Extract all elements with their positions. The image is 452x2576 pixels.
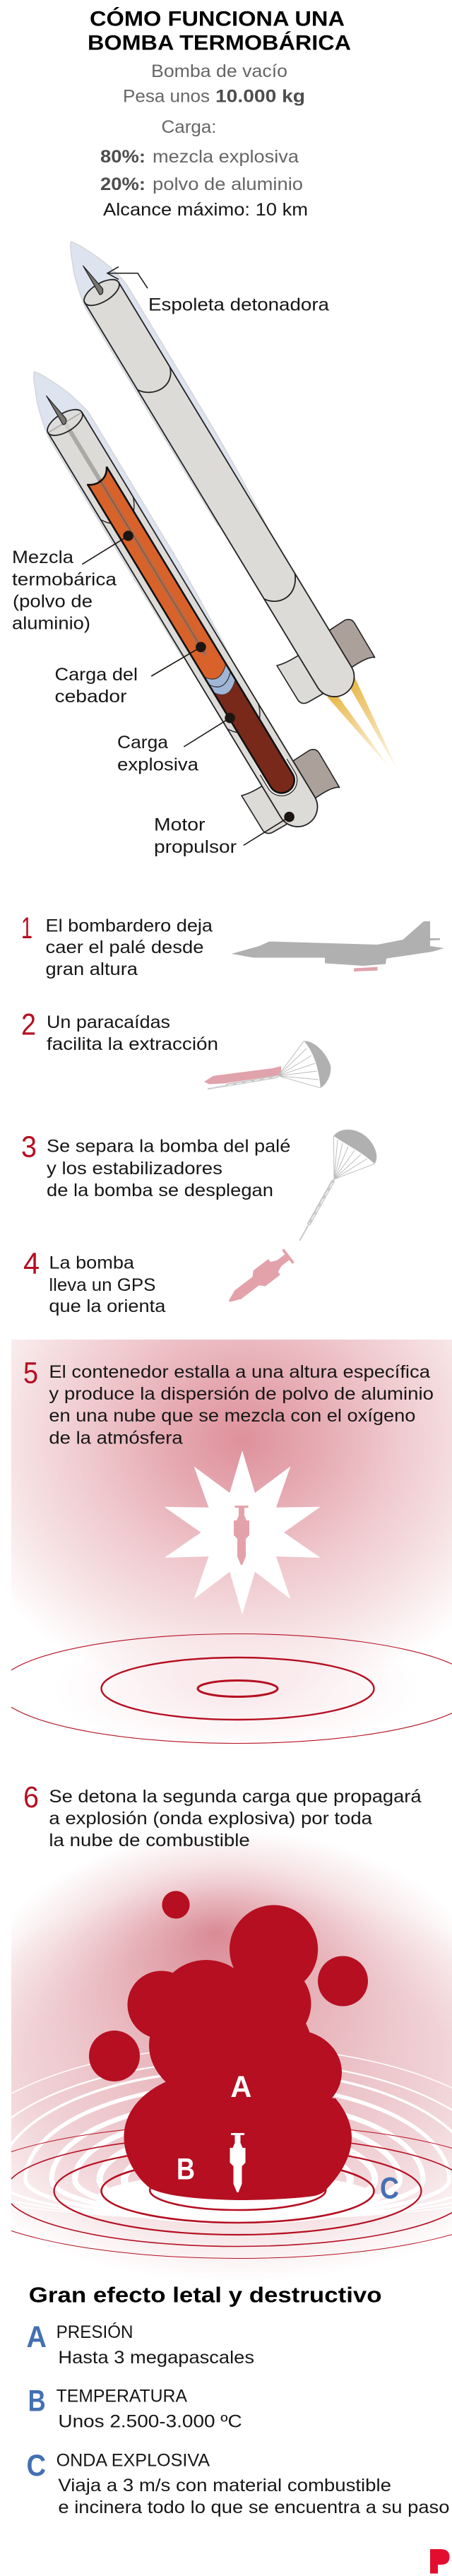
label: primer charge <box>55 665 138 707</box>
specs text block <box>100 61 308 220</box>
icon: guided bomb <box>223 1248 295 1309</box>
thermobaric mix <box>85 467 230 683</box>
item A: pressure: Hasta 3 megapascales <box>58 2348 254 2368</box>
step 1 <box>21 911 444 979</box>
label: thermobaric mix: aluminio) <box>12 613 90 633</box>
label: primer charge: cebador <box>55 687 127 707</box>
step 1 text: El bombardero deja <box>45 916 213 935</box>
step 6 text <box>49 1787 422 1850</box>
step 3 text: Se separa la bomba del palé <box>47 1137 290 1157</box>
icon: bomber aircraft <box>232 921 444 966</box>
glow background <box>11 1340 452 1763</box>
step 6 text: la nube de combustible <box>49 1831 250 1850</box>
bomb section view <box>16 359 330 835</box>
step 2 <box>21 1008 331 1089</box>
lower glow background <box>11 1830 452 2282</box>
upper glow background <box>11 1830 452 2282</box>
explosive charge <box>213 680 299 798</box>
icon: parachute with empty pallet <box>299 1130 376 1241</box>
number 5: 5 <box>23 1357 38 1390</box>
step 2 text: Un paracaídas <box>47 1012 170 1032</box>
item B: temperature <box>28 2385 242 2431</box>
label: fuze: Espoleta detonadora <box>148 295 329 315</box>
label: explosive charge <box>117 733 198 774</box>
panel: step 6, detonation <box>0 1780 452 2282</box>
step 4 text: que la orienta <box>49 1296 165 1316</box>
step 4 <box>23 1246 295 1316</box>
step 1 text <box>45 916 213 979</box>
label: thermobaric mix: termobárica <box>12 569 117 589</box>
fins <box>242 750 340 834</box>
shock wave bands <box>0 2047 452 2224</box>
icon: publisher logo <box>430 2549 449 2573</box>
item C: blast wave: e incinera todo lo que se encuentra a su paso <box>58 2498 449 2517</box>
specs text block: 10.000 kg <box>215 87 305 107</box>
ground rings <box>0 2124 452 2258</box>
step 3 text: de la bomba se desplegan <box>47 1181 273 1200</box>
label: rocket motor: propulsor <box>154 837 237 857</box>
label C: C <box>380 2172 399 2206</box>
step 4 text: lleva un GPS <box>49 1275 155 1295</box>
specs text block: Alcance máximo: 10 km <box>103 200 308 220</box>
step 6 text: a explosión (onda explosiva) por toda <box>49 1809 372 1828</box>
inner casing outline <box>85 467 299 798</box>
ground rings <box>0 1633 452 1744</box>
title: CÓMO FUNCIONA UNA <box>90 7 345 31</box>
bomb body with fairing <box>52 229 367 705</box>
label: rocket motor: Motor <box>154 815 205 835</box>
label: thermobaric mix: (polvo de <box>13 592 93 612</box>
step 5 text <box>49 1362 434 1448</box>
primer charge <box>204 663 239 699</box>
letter B: B <box>28 2385 46 2418</box>
exhaust flames <box>327 677 400 774</box>
label: explosive charge: explosiva <box>117 755 198 774</box>
exterior bomb <box>52 229 400 774</box>
specs text block: Carga: <box>161 117 216 137</box>
step 1 text: caer el palé desde <box>45 938 203 957</box>
leader lines and dots <box>82 531 295 845</box>
central rod in mix <box>101 482 205 654</box>
label B: B <box>177 2152 195 2186</box>
step 5 text: de la atmósfera <box>49 1429 183 1448</box>
step 3 text <box>47 1137 290 1200</box>
item B: temperature: Unos 2.500-3.000 ºC <box>58 2411 242 2431</box>
letter A: A <box>27 2320 47 2354</box>
number 3: 3 <box>21 1130 37 1164</box>
rim around explosive charge <box>234 716 303 802</box>
step 3 text: y los estabilizadores <box>47 1159 222 1178</box>
step 6 text: Se detona la segunda carga que propagará <box>49 1787 422 1807</box>
step 4 text: La bomba <box>49 1253 134 1273</box>
number 4: 4 <box>23 1246 40 1280</box>
central rod above cut <box>65 423 100 480</box>
icon: pallet under aircraft <box>354 967 377 971</box>
item C: blast wave: ONDA EXPLOSIVA <box>56 2451 210 2471</box>
label: primer charge: Carga del <box>55 665 138 685</box>
item C: blast wave: Viaja a 3 m/s con material combustible <box>58 2476 391 2495</box>
label A: A <box>230 2070 251 2104</box>
icon: bomb <box>230 2133 246 2192</box>
explosion cloud <box>89 1891 368 2200</box>
title <box>88 7 351 55</box>
step 4 text <box>49 1253 165 1316</box>
fins <box>277 620 375 704</box>
step 5 text: en una nube que se mezcla con el oxígeno <box>49 1406 415 1426</box>
step 5 text: El contenedor estalla a una altura específica <box>49 1362 430 1382</box>
starburst <box>165 1451 321 1614</box>
icon: parachute pulling pallet <box>204 1041 331 1089</box>
specs text block: mezcla explosiva <box>153 147 299 167</box>
specs text block: 80%: <box>100 147 145 167</box>
number 1: 1 <box>21 911 32 945</box>
label: thermobaric mix: Mezcla <box>12 548 73 567</box>
step 2 text: facilita la extracción <box>47 1034 218 1054</box>
item A: pressure: PRESIÓN <box>56 2322 133 2342</box>
item A: pressure <box>27 2320 254 2368</box>
step 2 text <box>47 1012 218 1054</box>
cutaway bomb <box>16 359 340 835</box>
item B: temperature: TEMPERATURA <box>56 2387 187 2406</box>
item C: blast wave <box>27 2449 449 2517</box>
step 5 text: y produce la dispersión de polvo de aluminio <box>49 1384 434 1404</box>
label: rocket motor <box>154 815 237 857</box>
label: explosive charge: Carga <box>117 733 168 752</box>
title: BOMBA TERMOBÁRICA <box>88 31 351 55</box>
step 3 <box>21 1130 376 1241</box>
panel: step 5, airburst <box>0 1340 452 1763</box>
letter C: C <box>27 2449 46 2483</box>
ground glow <box>54 1625 421 1752</box>
specs text block: Bomba de vacío <box>151 61 287 81</box>
number 2: 2 <box>21 1008 36 1042</box>
number 6: 6 <box>23 1780 39 1814</box>
icon: bomb <box>234 1506 249 1565</box>
specs text block: polvo de aluminio <box>153 175 303 194</box>
specs text block: 20%: <box>100 175 145 194</box>
callout: fuze arrow <box>107 267 148 288</box>
specs text block: Pesa unos <box>123 87 210 107</box>
label: thermobaric mix <box>12 548 117 633</box>
subheading: Gran efecto letal y destructivo <box>29 2282 382 2307</box>
step 1 text: gran altura <box>45 959 138 979</box>
